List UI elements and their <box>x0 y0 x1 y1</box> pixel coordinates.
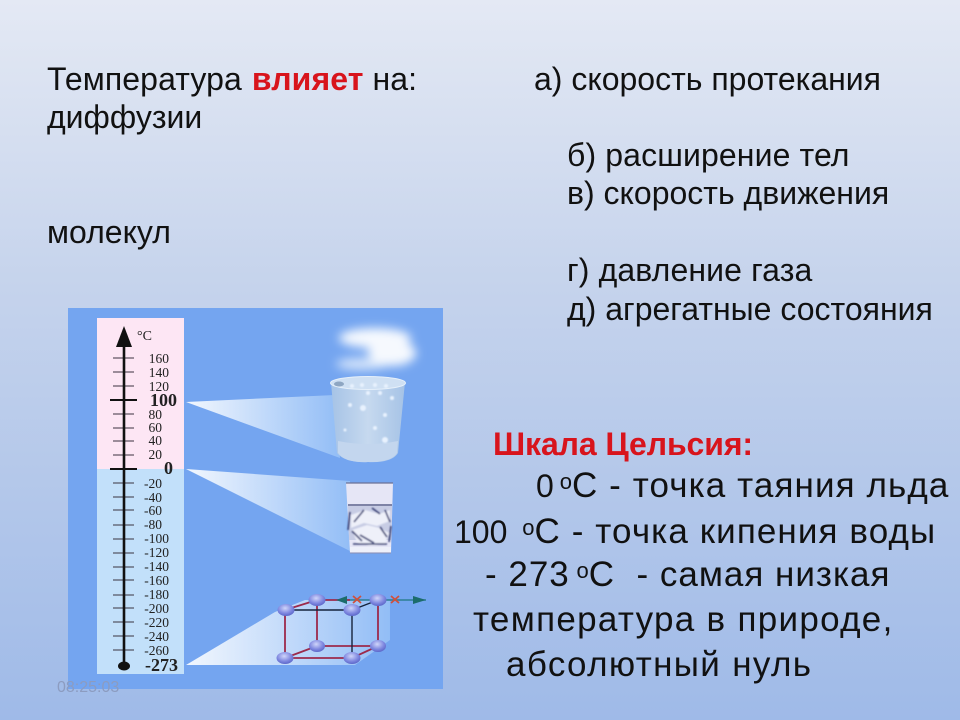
item b: б) расширение тел <box>567 137 850 173</box>
item d: г) давление газа <box>567 252 812 288</box>
scale labels: -60 <box>144 503 162 518</box>
scale labels <box>137 329 178 675</box>
beam: minus 273 to crystal lattice <box>186 600 390 665</box>
item a continuation: диффузии <box>47 99 202 135</box>
item a: а) скорость протекания <box>534 61 881 97</box>
icon: glass of boiling water <box>330 376 406 462</box>
scale labels: -120 <box>144 545 169 560</box>
scale labels: 80 <box>148 407 162 422</box>
scale labels: 40 <box>148 433 162 448</box>
heading: Celsius scale: Шкала Цельсия: <box>493 426 753 462</box>
line: absolute zero: - 273 оС - самая низкая <box>485 555 890 594</box>
line: lowest temperature: температура в природе, <box>473 600 894 639</box>
scale labels: 140 <box>149 365 169 380</box>
scale labels: -80 <box>144 517 162 532</box>
item e: д) агрегатные состояния <box>567 291 933 327</box>
scale labels: 60 <box>148 420 162 435</box>
ticks <box>113 358 134 650</box>
item c: в) скорость движения <box>567 175 889 211</box>
scale labels: 160 <box>149 351 169 366</box>
item c continuation: молекул <box>47 214 171 250</box>
scale labels: -220 <box>144 615 169 630</box>
icon: crystal lattice <box>276 594 426 664</box>
scale labels: -260 <box>144 643 169 658</box>
scale labels: 20 <box>148 447 162 462</box>
line: hundred: 100 оС - точка кипения воды <box>454 512 936 551</box>
text block: Celsius scale <box>454 426 949 684</box>
scale labels: -200 <box>144 601 169 616</box>
scale labels: -40 <box>144 490 162 505</box>
icon: glass with ice <box>346 483 393 553</box>
illustration panel: thermometer and states of matter <box>68 308 443 689</box>
arrow: vibration axis <box>350 599 426 601</box>
text block: temperature influences <box>47 61 933 327</box>
scale labels: 0 <box>164 458 173 478</box>
beam: 0 degrees to ice water <box>186 469 352 552</box>
thermometer scale <box>97 318 184 675</box>
heading line: Температура влияет на: <box>47 61 417 97</box>
icon: steam <box>336 328 416 370</box>
scale labels: -140 <box>144 559 169 574</box>
scale labels: °C <box>137 329 152 344</box>
scale labels: -160 <box>144 573 169 588</box>
scale labels: 120 <box>149 379 169 394</box>
scale labels: -20 <box>144 476 162 491</box>
scale labels: -273 <box>145 655 178 675</box>
line: zero: 0 оС - точка таяния льда <box>536 466 949 505</box>
line: absolute zero name: абсолютный нуль <box>506 645 812 684</box>
scale labels: -100 <box>144 531 169 546</box>
scale labels: -180 <box>144 587 169 602</box>
scale labels: -240 <box>144 629 169 644</box>
timestamp: 08:25:03 <box>57 679 119 696</box>
beam: 100 degrees to boiling water <box>186 395 340 458</box>
axis with arrow <box>123 340 125 666</box>
scale labels: 100 <box>150 390 177 410</box>
